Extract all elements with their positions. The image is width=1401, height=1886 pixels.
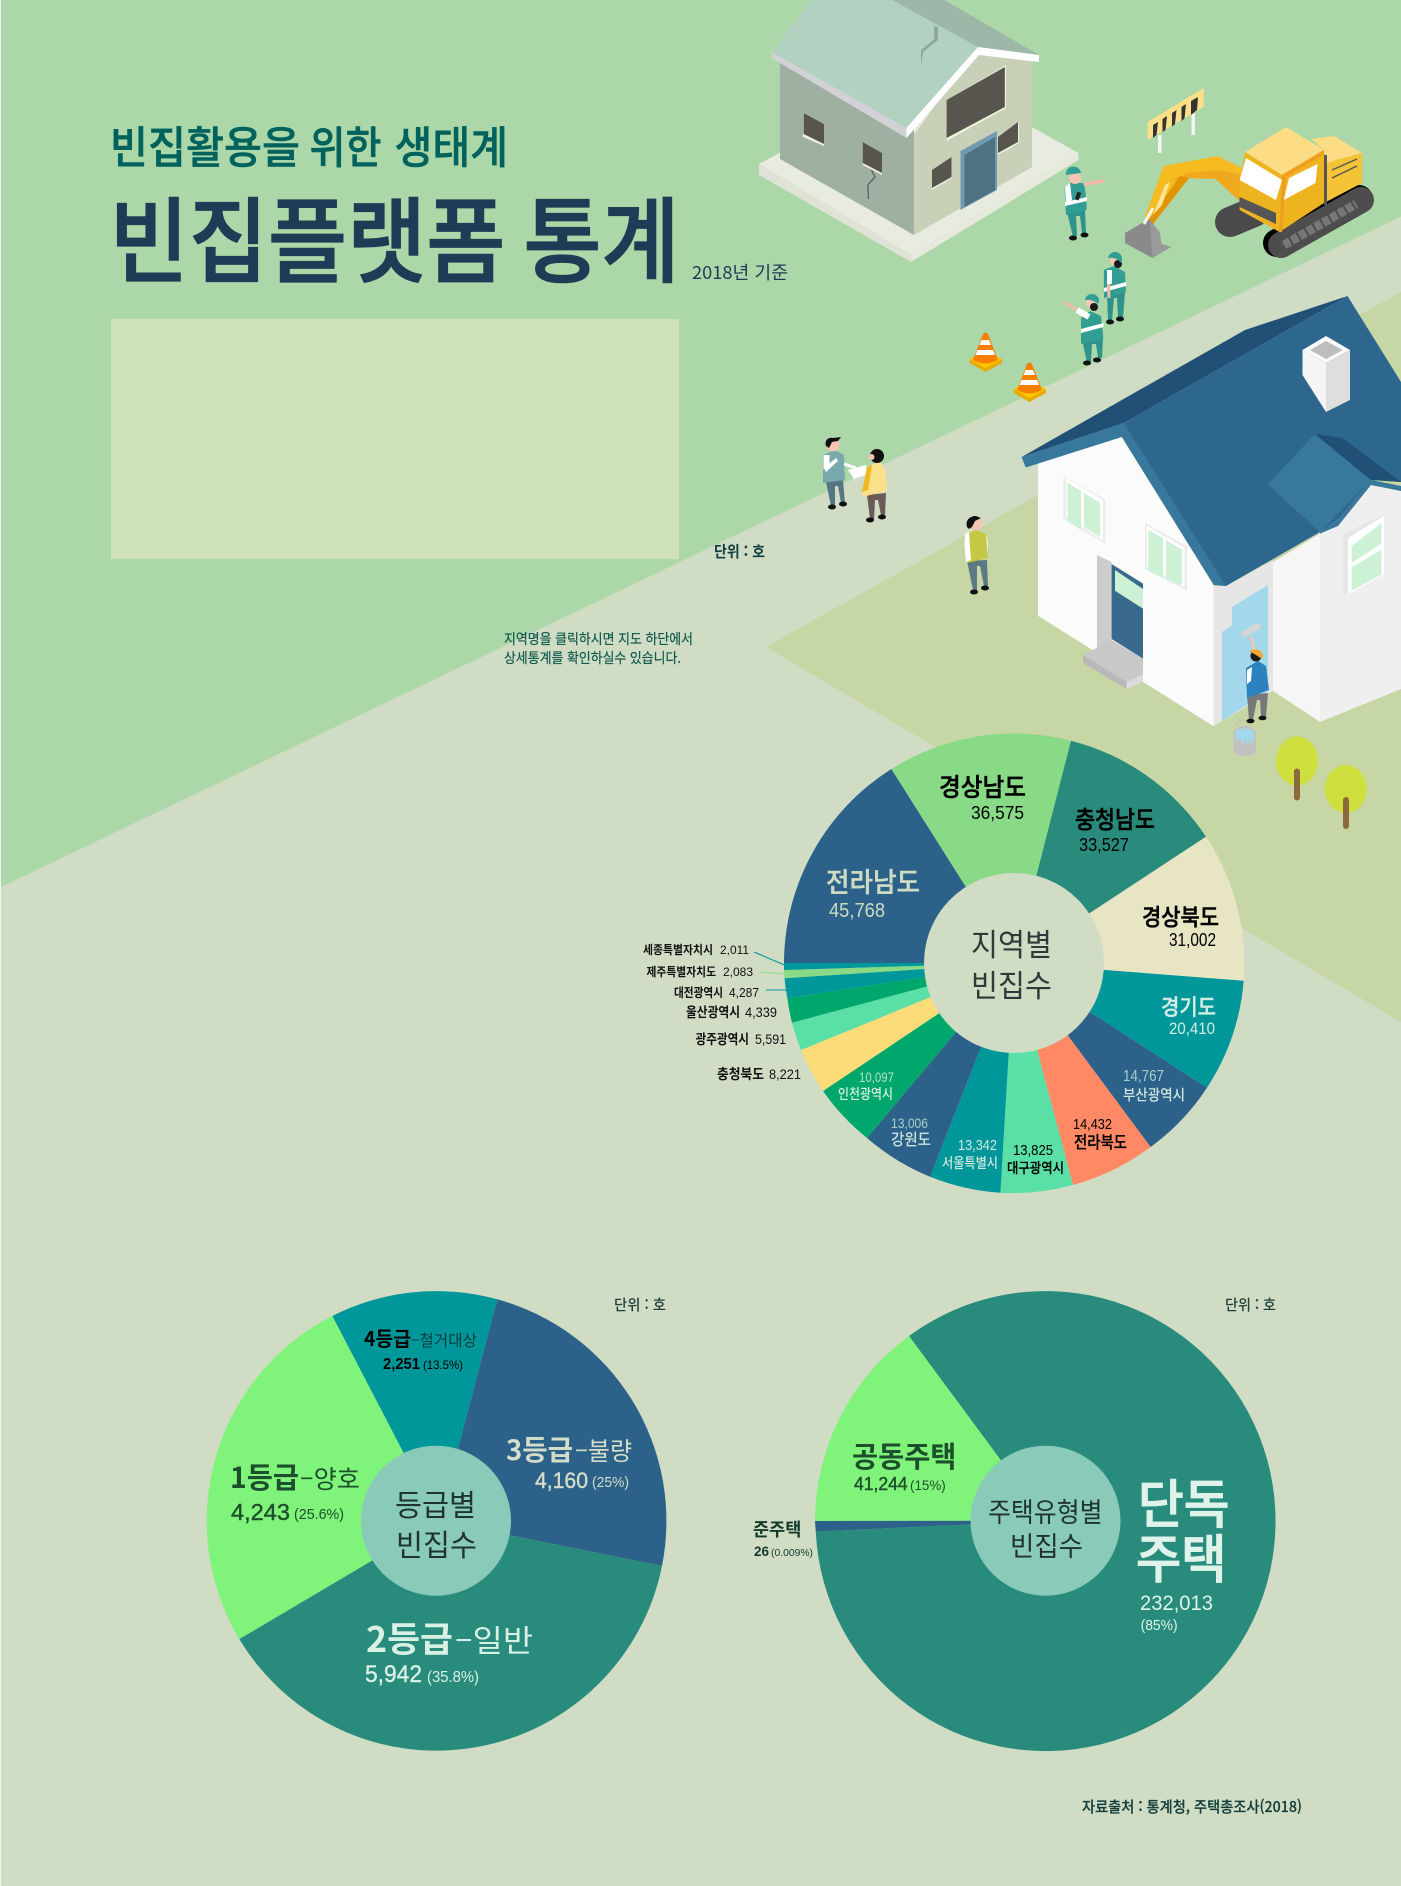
label: 대구광역시 xyxy=(1007,1142,1064,1178)
label: semi-detached xyxy=(753,1516,813,1559)
label: 강원도: 강원도 xyxy=(891,1126,931,1150)
title block xyxy=(110,112,788,302)
illustration: person in olive vest xyxy=(964,516,989,594)
label: 광주광역시: 광주광역시 xyxy=(696,1028,749,1048)
donut chart: vacant houses by grade xyxy=(207,1291,666,1751)
label: semi-detached: 26 xyxy=(754,1543,769,1559)
illustration: worker pointing right xyxy=(1065,166,1103,240)
label: 경상남도 xyxy=(939,768,1026,823)
center label: housing type xyxy=(988,1491,1102,1564)
label: detached: 주택 xyxy=(1136,1518,1226,1593)
label: 전라남도 xyxy=(826,861,920,922)
label: 서울특별시: 서울특별시 xyxy=(942,1153,998,1173)
center label: grade: 등급별 xyxy=(395,1481,476,1525)
source note: 자료출처 : 통계청, 주택총조사(2018) xyxy=(1082,1796,1302,1817)
label: 서울특별시 xyxy=(942,1137,998,1173)
center label: region: 지역별 xyxy=(971,920,1052,965)
label: 충청남도: 33,527 xyxy=(1079,835,1129,855)
label: 경상북도: 경상북도 xyxy=(1142,898,1219,932)
label: 경상북도 xyxy=(1142,898,1219,950)
label: grade 4: 4등급 xyxy=(364,1323,411,1352)
chimney xyxy=(1302,350,1326,412)
label: apartment: 공동주택 xyxy=(852,1434,956,1476)
label: 경상남도: 경상남도 xyxy=(939,768,1026,804)
label: 충청북도 xyxy=(717,1064,801,1084)
label: 서울특별시: 13,342 xyxy=(958,1137,997,1154)
label: grade 2: 2등급 xyxy=(366,1612,453,1663)
label: grade 3: (25%) xyxy=(592,1474,629,1491)
illustration: excavator xyxy=(1125,127,1362,258)
label: grade 4: (13.5%) xyxy=(423,1358,463,1372)
subtitle xyxy=(110,112,508,176)
base year: 2018년 기준 xyxy=(692,259,788,285)
label: 제주특별자치도: 2,083 xyxy=(723,965,753,979)
label: grade 2: –일반 xyxy=(455,1616,533,1661)
center label: region: 빈집수 xyxy=(971,961,1052,1006)
label: 세종특별자치시: 세종특별자치시 xyxy=(643,941,713,958)
label: 울산광역시: 울산광역시 xyxy=(686,1001,740,1021)
illustration: worker standing xyxy=(1104,252,1126,324)
label: grade 1 xyxy=(230,1455,360,1525)
label: grade 2 xyxy=(365,1612,533,1688)
label: 경기도: 20,410 xyxy=(1169,1019,1215,1038)
label: grade 3 xyxy=(506,1429,632,1493)
label: grade 4: 2,251 xyxy=(383,1356,420,1373)
illustration: old grey house xyxy=(759,0,1078,262)
icon: traffic cone 1 xyxy=(970,332,1002,372)
label: apartment: 41,244 xyxy=(854,1474,908,1494)
label: 대전광역시: 4,287 xyxy=(729,986,759,1000)
label: 인천광역시: 10,097 xyxy=(859,1069,894,1085)
icon: paint bucket xyxy=(1234,719,1256,756)
main title: 통계 xyxy=(524,167,680,302)
label: 대구광역시: 13,825 xyxy=(1013,1142,1053,1159)
map instruction note: 상세통계를 확인하실수 있습니다. xyxy=(504,648,681,668)
label: 강원도 xyxy=(891,1115,931,1150)
icon: tree 2 xyxy=(1325,765,1367,829)
label: grade 2: 5,942 xyxy=(365,1661,422,1688)
label: apartment xyxy=(852,1434,956,1494)
map instruction note: 지역명을 클릭하시면 지도 하단에서 xyxy=(504,629,693,649)
roof xyxy=(1022,296,1348,457)
unit label: housing type chart: 단위 : 호 xyxy=(1225,1294,1276,1315)
label: grade 1: –양호 xyxy=(300,1460,360,1496)
label: 경기도: 경기도 xyxy=(1161,990,1216,1022)
main title: 빈집플랫폼 xyxy=(110,167,506,302)
label: 세종특별자치시: 2,011 xyxy=(720,943,749,957)
icon: traffic cone 2 xyxy=(1014,362,1046,402)
label: 충청남도 xyxy=(1075,800,1155,855)
label: semi-detached: (0.009%) xyxy=(771,1547,813,1559)
label: grade 3: 4,160 xyxy=(535,1468,588,1493)
label: semi-detached: 준주택 xyxy=(753,1516,801,1542)
illustration: new white house xyxy=(1022,296,1401,726)
label: 경상북도: 31,002 xyxy=(1169,930,1216,950)
label: grade 2: (35.8%) xyxy=(427,1669,479,1686)
door xyxy=(1097,555,1112,650)
illustration: barricade xyxy=(1148,88,1204,153)
subtitle: 위한 xyxy=(310,112,382,176)
label: detached xyxy=(1136,1463,1230,1634)
map placeholder panel xyxy=(111,319,679,559)
illustration: painter xyxy=(1244,626,1269,723)
label: 경상남도: 36,575 xyxy=(971,803,1024,823)
label: 울산광역시 xyxy=(686,1001,777,1021)
label: 부산광역시: 14,767 xyxy=(1123,1068,1164,1085)
label: 강원도: 13,006 xyxy=(891,1115,928,1131)
label: detached: 232,013 xyxy=(1140,1592,1213,1615)
illustration: worker pointing left xyxy=(1065,294,1104,366)
label: 전라남도: 45,768 xyxy=(829,900,885,922)
unit label: map: 단위 : 호 xyxy=(714,540,765,562)
label: grade 3: 3등급 xyxy=(506,1429,573,1469)
step xyxy=(1083,640,1143,682)
donut chart: vacant houses by region xyxy=(643,734,1244,1193)
label: 대전광역시: 대전광역시 xyxy=(674,982,723,1001)
label: 울산광역시: 4,339 xyxy=(745,1005,777,1020)
label: 전라북도 xyxy=(1073,1116,1127,1153)
door xyxy=(960,131,997,210)
label: 충청남도: 충청남도 xyxy=(1075,800,1155,835)
leader lines xyxy=(754,952,786,990)
center label: grade: 빈집수 xyxy=(396,1521,477,1565)
subtitle: 빈집활용을 xyxy=(110,112,300,176)
label: 광주광역시 xyxy=(696,1028,786,1048)
unit label: grade chart: 단위 : 호 xyxy=(614,1294,666,1315)
small windows xyxy=(998,122,1019,155)
label: detached: (85%) xyxy=(1141,1617,1178,1634)
label: grade 3: –불량 xyxy=(575,1432,632,1468)
label: 부산광역시: 부산광역시 xyxy=(1123,1084,1185,1105)
center label: housing type: 빈집수 xyxy=(1010,1525,1083,1564)
map instruction note xyxy=(504,629,693,668)
label: 전라북도: 14,432 xyxy=(1073,1116,1112,1133)
label: 충청북도: 8,221 xyxy=(769,1066,801,1082)
label: 전라북도: 전라북도 xyxy=(1074,1129,1127,1153)
label: 제주특별자치도: 제주특별자치도 xyxy=(646,963,716,980)
label: 인천광역시: 인천광역시 xyxy=(838,1084,893,1104)
label: grade 1: (25.6%) xyxy=(294,1506,344,1523)
donut chart: vacant houses by housing type xyxy=(753,1291,1276,1751)
label: 대전광역시 xyxy=(674,982,759,1001)
center label: grade xyxy=(395,1481,477,1565)
subtitle: 생태계 xyxy=(394,112,508,176)
label: 경기도 xyxy=(1161,990,1216,1038)
label: detached: 단독 xyxy=(1138,1463,1230,1538)
center label: region xyxy=(971,920,1052,1006)
label: 광주광역시: 5,591 xyxy=(755,1032,786,1047)
label: 부산광역시 xyxy=(1123,1068,1185,1105)
label: grade 4: –철거대상 xyxy=(411,1327,477,1351)
label: 대구광역시: 대구광역시 xyxy=(1007,1158,1064,1178)
center label: housing type: 주택유형별 xyxy=(988,1491,1102,1530)
label: grade 1: 4,243 xyxy=(231,1499,290,1525)
label: grade 4 xyxy=(364,1323,477,1373)
label: grade 1: 1등급 xyxy=(230,1455,299,1497)
label: 인천광역시 xyxy=(838,1069,894,1104)
label: 전라남도: 전라남도 xyxy=(826,861,920,900)
icon: tree 1 xyxy=(1276,736,1318,800)
big window xyxy=(947,65,1006,141)
label: apartment: (15%) xyxy=(910,1477,946,1493)
label: 충청북도: 충청북도 xyxy=(717,1064,764,1084)
illustration: two people talking xyxy=(823,437,887,522)
windows xyxy=(1063,476,1106,544)
